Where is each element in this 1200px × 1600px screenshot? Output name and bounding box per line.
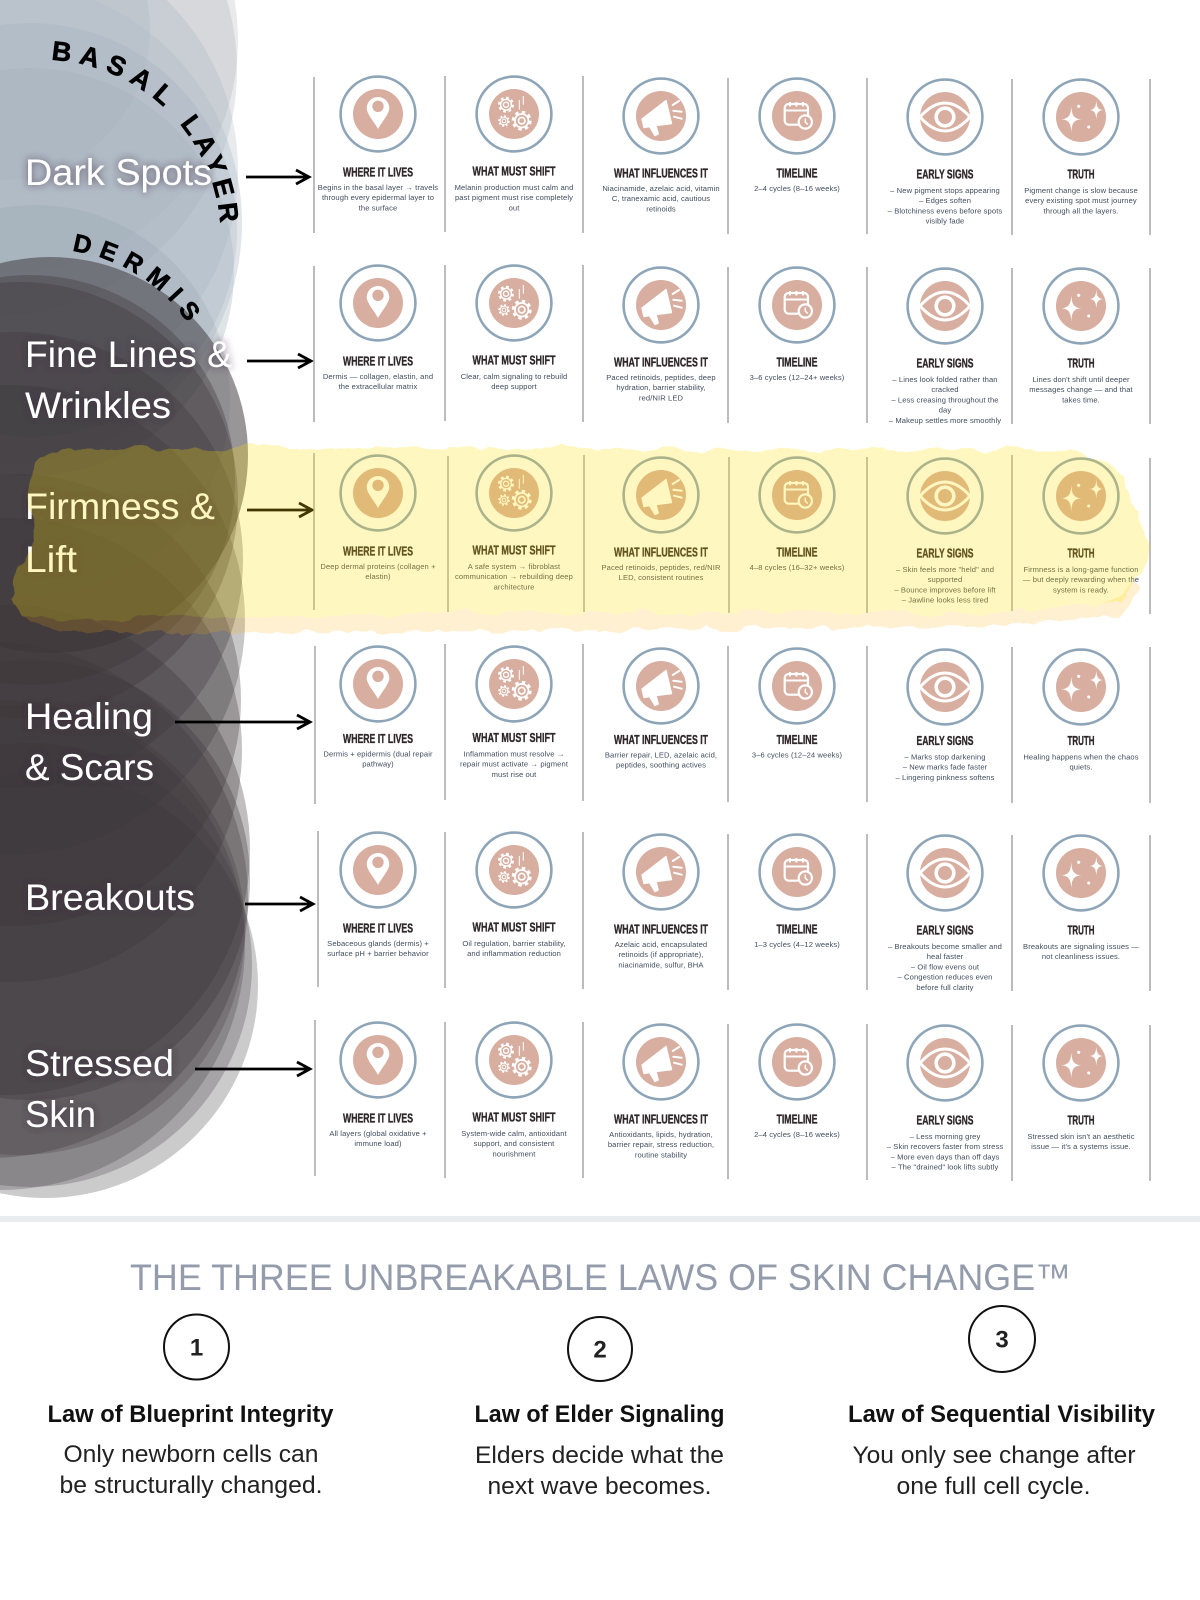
body: — but deeply rewarding when the: [1023, 575, 1139, 584]
number badge 3: 3: [995, 1326, 1009, 1354]
body: Oil regulation, barrier stability,: [462, 939, 566, 948]
cell: truth: [1029, 269, 1134, 404]
body: Sebaceous glands (dermis) +: [327, 939, 429, 948]
cell: timeline: [750, 458, 845, 572]
panel: dermis circles: [0, 257, 258, 1198]
cell: timeline: [754, 79, 840, 193]
icon: calendar: [760, 79, 834, 153]
heading: TRUTH: [1068, 168, 1094, 182]
heading: WHAT INFLUENCES IT: [614, 166, 708, 180]
body: out: [509, 203, 520, 212]
body: Paced retinoids, peptides, deep: [606, 373, 716, 382]
cell: what must shift: [460, 647, 569, 779]
heading: TIMELINE: [776, 546, 818, 560]
cell: what must shift: [462, 833, 566, 958]
icon: eye: [908, 80, 982, 154]
body: – Lines look folded rather than: [892, 375, 998, 384]
body: before full clarity: [916, 983, 974, 992]
heading: WHAT MUST SHIFT: [472, 1110, 556, 1124]
body: every existing spot must journey: [1025, 196, 1137, 205]
number badge 1: [164, 1314, 229, 1380]
body: pathway): [362, 760, 394, 769]
cell: early signs: [888, 80, 1002, 226]
heading: EARLY SIGNS: [916, 1114, 974, 1128]
icon: calendar: [760, 1025, 834, 1099]
body: All layers (global oxidative +: [329, 1129, 427, 1138]
heading: WHAT INFLUENCES IT: [614, 356, 708, 370]
icon: calendar: [760, 268, 834, 342]
law 1: [48, 1314, 334, 1499]
body: Pigment change is slow because: [1024, 186, 1138, 195]
heading: WHERE IT LIVES: [343, 354, 413, 368]
law 2 heading: Law of Elder Signaling: [474, 1401, 724, 1428]
body: peptides, soothing actives: [616, 761, 706, 770]
law 2: [474, 1317, 724, 1500]
heading: WHAT MUST SHIFT: [472, 164, 556, 178]
row label: healing and scars: & Scars: [25, 747, 154, 788]
row label: dark spots: Dark Spots: [25, 152, 212, 193]
heading: WHERE IT LIVES: [343, 1112, 413, 1126]
body: Dermis + epidermis (dual repair: [323, 750, 433, 758]
cell: where it lives: [323, 647, 433, 769]
icon: sparkle: [1044, 269, 1118, 343]
heading: WHAT MUST SHIFT: [472, 731, 556, 745]
arrow: healing: [175, 715, 310, 729]
icon: pin: [341, 1023, 415, 1097]
icon: eye: [908, 650, 982, 724]
body: Antioxidants, lipids, hydration,: [609, 1130, 713, 1139]
icon: gears: [477, 647, 551, 721]
body: supported: [928, 575, 962, 584]
icon: megaphone: [624, 649, 698, 723]
cell: what must shift: [461, 1023, 568, 1158]
number badge 3: [969, 1306, 1035, 1372]
body: Melanin production must calm and: [455, 183, 573, 192]
body: retinoids (if appropriate),: [618, 950, 704, 959]
cell: where it lives: [318, 77, 438, 212]
body: Barrier repair, LED, azelaic acid,: [605, 750, 717, 760]
icon: megaphone: [624, 79, 698, 153]
body: surface pH + barrier behavior: [327, 949, 429, 958]
cell: truth: [1023, 650, 1139, 772]
body: – Breakouts become smaller and: [888, 942, 1002, 951]
row: healing and scars: [315, 644, 1150, 804]
law 1 heading: Law of Blueprint Integrity: [48, 1401, 334, 1428]
body: Clear, calm signaling to rebuild: [461, 372, 567, 381]
row label: stressed skin: Stressed: [25, 1043, 174, 1084]
arrow: stressed skin: [195, 1062, 310, 1076]
arrow: fine lines: [247, 354, 311, 368]
cell: where it lives: [320, 456, 436, 581]
icon: megaphone: [624, 458, 698, 532]
heading: EARLY SIGNS: [916, 734, 974, 748]
heading: WHAT INFLUENCES IT: [614, 546, 708, 560]
body: red/NIR LED: [639, 393, 683, 402]
body: elastin): [365, 572, 391, 581]
cell: early signs: [889, 269, 1001, 425]
body: nourishment: [493, 1149, 536, 1158]
number badge 2: [568, 1317, 632, 1381]
body: 2–4 cycles (8–16 weeks): [754, 184, 840, 193]
body: Niacinamide, azelaic acid, vitamin: [602, 184, 720, 193]
cell: truth: [1024, 80, 1138, 215]
body: niacinamide, sulfur, BHA: [618, 960, 704, 969]
cell: truth: [1023, 459, 1139, 594]
law 2 text: next wave becomes.: [488, 1473, 712, 1500]
body: deep support: [491, 382, 538, 391]
cell: where it lives: [329, 1023, 427, 1148]
heading: TRUTH: [1068, 546, 1094, 560]
row label: healing and scars: Healing: [25, 696, 153, 737]
body: takes time.: [1062, 395, 1100, 404]
body: day: [939, 406, 951, 415]
arrow: dark spots: [246, 170, 309, 184]
body: through every epidermal layer to: [322, 193, 434, 202]
cell: timeline: [754, 1025, 840, 1139]
body: Paced retinoids, peptides, red/NIR: [601, 563, 721, 572]
body: the extracellular matrix: [339, 382, 417, 391]
body: C, tranexamic acid, cautious: [612, 194, 710, 203]
body: immune load): [354, 1139, 402, 1148]
heading: WHERE IT LIVES: [343, 544, 413, 558]
heading: WHAT INFLUENCES IT: [614, 1112, 708, 1126]
icon: eye: [908, 269, 982, 343]
heading: WHAT MUST SHIFT: [472, 920, 556, 934]
body: System-wide calm, antioxidant: [461, 1129, 567, 1138]
cell: where it lives: [327, 833, 429, 958]
number badge 2: 2: [593, 1336, 607, 1364]
icon: gears: [477, 456, 551, 530]
body: 3–6 cycles (12–24 weeks): [752, 750, 842, 760]
heading: EARLY SIGNS: [916, 168, 974, 182]
law 3 text: [852, 1442, 1136, 1500]
cell: what influences it: [602, 79, 720, 213]
heading: TRUTH: [1068, 924, 1094, 938]
body: – Skin recovers faster from stress: [887, 1142, 1003, 1151]
body: quiets.: [1069, 763, 1093, 772]
cell: truth: [1023, 836, 1139, 961]
heading: TIMELINE: [776, 166, 818, 180]
body: through all the layers.: [1044, 206, 1118, 215]
heading: EARLY SIGNS: [916, 924, 974, 938]
heading: TRUTH: [1068, 356, 1094, 370]
icon: sparkle: [1044, 80, 1118, 154]
law 1 text: [60, 1441, 322, 1499]
icon: pin: [341, 833, 415, 907]
icon: megaphone: [624, 835, 698, 909]
cell: what influences it: [606, 268, 716, 402]
body: – Lingering pinkness softens: [895, 773, 995, 782]
cell: what influences it: [605, 649, 717, 770]
law 3 text: one full cell cycle.: [896, 1473, 1090, 1500]
row label: fine lines and wrinkles: Wrinkles: [25, 385, 171, 426]
heading: TRUTH: [1068, 734, 1094, 748]
cell: early signs: [895, 650, 995, 782]
arrow: firmness: [247, 503, 312, 517]
law 3 heading: Law of Sequential Visibility: [848, 1401, 1156, 1428]
icon: megaphone: [624, 268, 698, 342]
body: Deep dermal proteins (collagen +: [320, 562, 436, 571]
heading: TIMELINE: [776, 1112, 818, 1126]
row label: fine lines and wrinkles: Fine Lines &: [25, 334, 232, 375]
cell: timeline: [752, 649, 842, 760]
body: and inflammation reduction: [467, 949, 561, 958]
cell: what influences it: [601, 458, 721, 582]
row label: firmness and lift: [25, 486, 215, 580]
icon: calendar: [760, 649, 834, 723]
law 3 text: You only see change after: [852, 1442, 1136, 1469]
cell: early signs: [887, 1026, 1003, 1172]
row label: fine lines and wrinkles: [25, 334, 232, 426]
heading: WHAT INFLUENCES IT: [614, 733, 708, 747]
arrow: breakouts: [245, 897, 313, 911]
icon: calendar: [760, 458, 834, 532]
row: stressed skin: [315, 1020, 1150, 1181]
body: barrier repair, stress reduction,: [608, 1140, 714, 1149]
body: – New marks fade faster: [903, 763, 988, 772]
icon: sparkle: [1044, 1026, 1118, 1100]
law 1 text: Only newborn cells can: [64, 1441, 318, 1468]
curved label: dermis: DERMIS: [73, 234, 200, 320]
icon: calendar: [760, 835, 834, 909]
heading: WHERE IT LIVES: [343, 732, 413, 746]
icon: pin: [341, 77, 415, 151]
number badge 1: 1: [190, 1334, 203, 1362]
body: architecture: [494, 582, 534, 591]
cell: what must shift: [455, 77, 573, 212]
heading: TIMELINE: [776, 356, 818, 370]
icon: gears: [477, 77, 551, 151]
body: – More even days than off days: [891, 1152, 1000, 1161]
row: firmness and lift: [314, 453, 1150, 614]
icon: sparkle: [1044, 459, 1118, 533]
body: Lines don't shift until deeper: [1032, 375, 1130, 384]
icon: gears: [477, 1023, 551, 1097]
body: – New pigment stops appearing: [890, 186, 1000, 195]
icon: pin: [341, 266, 415, 340]
body: – Less morning grey: [910, 1132, 980, 1141]
body: cracked: [931, 385, 959, 394]
heading: EARLY SIGNS: [916, 546, 974, 560]
icon: gears: [477, 833, 551, 907]
body: system is ready.: [1053, 585, 1109, 594]
cell: what influences it: [614, 835, 708, 969]
body: 2–4 cycles (8–16 weeks): [754, 1130, 840, 1139]
panel: basal layer circles: [0, 0, 242, 595]
row label: stressed skin: [25, 1043, 174, 1135]
divider band: [0, 1216, 1200, 1222]
body: heal faster: [927, 952, 964, 961]
body: LED, consistent routines: [619, 573, 703, 582]
body: – Edges soften: [919, 196, 971, 205]
heading: WHAT INFLUENCES IT: [614, 922, 708, 936]
law 2 text: Elders decide what the: [475, 1442, 724, 1469]
row label: firmness and lift: Firmness &: [25, 486, 215, 527]
body: – Oil flow evens out: [911, 962, 980, 971]
body: messages change — and that: [1029, 385, 1134, 394]
body: 1–3 cycles (4–12 weeks): [754, 940, 840, 949]
body: hydration, barrier stability,: [616, 383, 706, 392]
heading: WHERE IT LIVES: [343, 166, 413, 180]
body: – Less creasing throughout the: [891, 395, 999, 404]
heading: TRUTH: [1068, 1114, 1094, 1128]
heading: TIMELINE: [776, 733, 818, 747]
body: 4–8 cycles (16–32+ weeks): [750, 563, 845, 572]
row label: breakouts: Breakouts: [25, 877, 195, 918]
icon: sparkle: [1044, 836, 1118, 910]
law 2 text: [475, 1442, 724, 1500]
body: Begins in the basal layer → travels: [318, 183, 438, 192]
body: – Jawline looks less tired: [902, 596, 988, 605]
row: fine lines and wrinkles: [314, 265, 1150, 425]
body: Azelaic acid, encapsulated: [615, 940, 707, 949]
row: breakouts: [318, 831, 1150, 992]
body: repair must activate → pigment: [460, 760, 569, 769]
body: – Congestion reduces even: [898, 973, 992, 982]
cell: where it lives: [323, 266, 433, 391]
body: routine stability: [635, 1150, 687, 1159]
body: – Blotchiness evens before spots: [888, 206, 1002, 215]
title: three unbreakable laws: THE THREE UNBREAKABLE LAWS OF SKIN CHANGE™: [130, 1257, 1071, 1298]
body: 3–6 cycles (12–24+ weeks): [750, 373, 845, 382]
icon: eye: [908, 836, 982, 910]
body: must rise out: [492, 770, 537, 779]
body: retinoids: [646, 204, 676, 213]
row label: healing and scars: [25, 696, 154, 788]
heading: EARLY SIGNS: [916, 356, 974, 370]
cell: what influences it: [608, 1025, 714, 1159]
body: – Skin feels more "held" and: [896, 565, 994, 574]
heading: WHERE IT LIVES: [343, 922, 413, 936]
row: dark spots: [314, 76, 1150, 235]
body: support, and consistent: [474, 1139, 555, 1148]
law 3: [848, 1306, 1156, 1500]
body: past pigment must rise completely: [455, 193, 573, 202]
body: – Makeup settles more smoothly: [889, 416, 1001, 425]
body: Inflammation must resolve →: [463, 750, 565, 758]
icon: sparkle: [1044, 650, 1118, 724]
body: Breakouts are signaling issues —: [1023, 942, 1139, 951]
body: A safe system → fibroblast: [468, 562, 560, 571]
body: – Bounce improves before lift: [894, 585, 996, 594]
highlight: firmness row brush stroke: [11, 447, 1149, 632]
cell: what must shift: [455, 456, 573, 591]
icon: gears: [477, 266, 551, 340]
row label: stressed skin: Skin: [25, 1094, 96, 1135]
body: the surface: [359, 203, 397, 212]
icon: eye: [908, 1026, 982, 1100]
body: visibly fade: [926, 217, 964, 226]
icon: pin: [341, 647, 415, 721]
body: – Marks stop darkening: [904, 752, 986, 762]
cell: early signs: [894, 459, 996, 605]
body: Healing happens when the chaos: [1023, 752, 1139, 762]
cell: truth: [1027, 1026, 1135, 1151]
body: not cleanliness issues.: [1042, 952, 1120, 961]
body: Firmness is a long-game function: [1023, 565, 1139, 574]
icon: pin: [341, 456, 415, 530]
icon: eye: [908, 459, 982, 533]
curved label: basal layer: BASAL LAYER: [52, 41, 238, 224]
row label: firmness and lift: Lift: [25, 539, 78, 580]
cell: timeline: [754, 835, 840, 949]
heading: WHAT MUST SHIFT: [472, 544, 556, 558]
law 1 text: be structurally changed.: [60, 1472, 322, 1499]
body: issue — it's a systems issue.: [1031, 1142, 1131, 1151]
heading: WHAT MUST SHIFT: [472, 354, 556, 368]
cell: timeline: [750, 268, 845, 382]
body: Stressed skin isn't an aesthetic: [1027, 1132, 1135, 1141]
icon: megaphone: [624, 1025, 698, 1099]
heading: TIMELINE: [776, 922, 818, 936]
body: Dermis — collagen, elastin, and: [323, 372, 433, 381]
body: – The "drained" look lifts subtly: [892, 1163, 999, 1172]
cell: early signs: [888, 836, 1002, 992]
body: communication → rebuilding deep: [455, 572, 573, 581]
cell: what must shift: [461, 266, 567, 391]
